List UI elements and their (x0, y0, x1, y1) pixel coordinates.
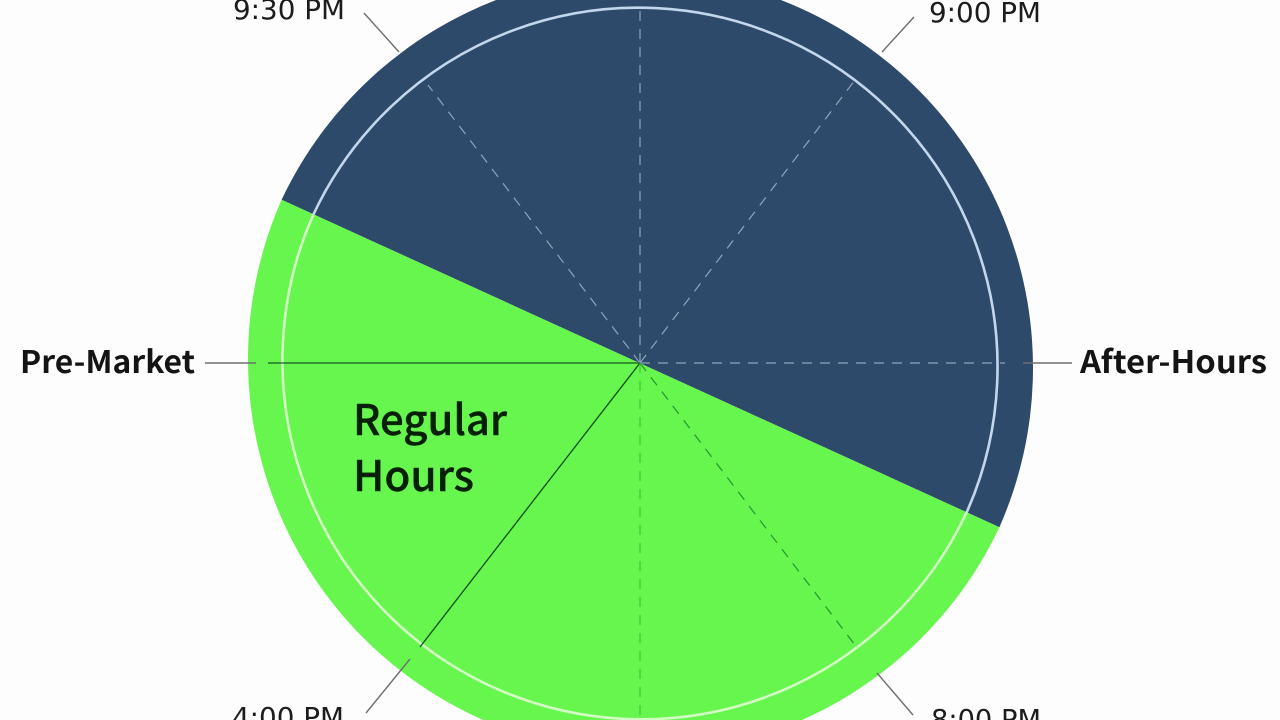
spokes on navy half (428, 6, 1005, 363)
inner ring (282, 8, 998, 719)
label: Regular Hours: Hours (353, 443, 474, 504)
label: Regular Hours: Regular (353, 387, 508, 448)
label: Pre-Market: Pre-Market (20, 337, 195, 382)
slice: navy upper half (282, 0, 1033, 527)
leader lines (205, 13, 1072, 715)
label: Regular Hours (353, 387, 508, 504)
label: After-Hours: After-Hours (1079, 337, 1267, 382)
dial: pie of sessions (248, 0, 1033, 720)
slice: green lower half (248, 200, 999, 720)
spokes on green half (268, 363, 855, 720)
